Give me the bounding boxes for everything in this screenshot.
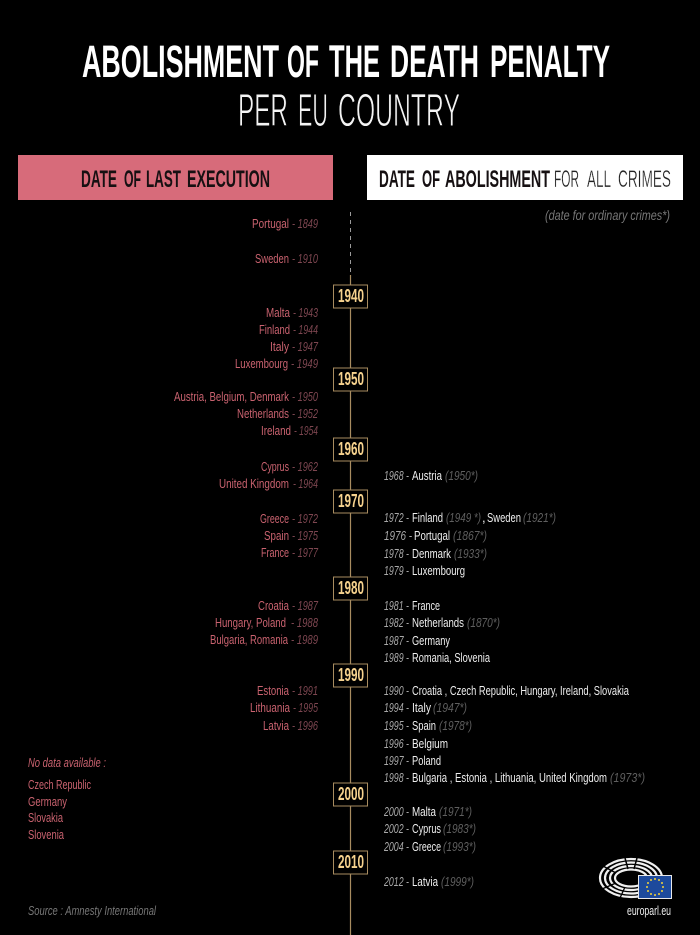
row: 2004 Greece: Greece <box>412 839 441 854</box>
row: 1997 Poland: Poland <box>412 753 441 768</box>
decade marker: 2000 <box>334 783 368 806</box>
row: 1989 Romania, Slovenia: 1989 - <box>384 650 409 665</box>
row: Greece 1972: - 1972 <box>292 511 319 526</box>
row: 1968 Austria: 1968 - <box>384 468 409 483</box>
row: 1996 Belgium: 1996 - <box>384 736 409 751</box>
row: Finland 1944: Finland <box>259 322 290 337</box>
row: 1972 Finland, Sweden: (1949 *) <box>446 510 481 525</box>
row: Ireland 1954: - 1954 <box>294 423 318 438</box>
row: United Kingdom 1964: United Kingdom <box>219 476 289 491</box>
row: 1972 Finland, Sweden <box>384 510 556 525</box>
panel: last execution list <box>174 216 319 733</box>
row: Luxembourg 1949: Luxembourg <box>235 356 288 371</box>
decade marker: 2010: 2010 <box>338 852 364 872</box>
row: 2002 Cyprus: (1983*) <box>443 821 476 836</box>
row: 2000 Malta: 2000 - <box>383 804 409 819</box>
panel: date of abolishment header: FOR <box>554 166 579 193</box>
panel: date of abolishment header: DATE <box>379 166 415 193</box>
row: 2002 Cyprus <box>383 821 476 836</box>
row: Ireland 1954: Ireland <box>261 423 291 438</box>
row: Sweden 1910: - 1910 <box>292 251 319 266</box>
title <box>82 36 610 136</box>
row: Lithuania 1995: Lithuania <box>250 700 291 715</box>
row: 1976 Portugal: Portugal <box>414 528 450 543</box>
row: 1968 Austria: Austria <box>412 468 443 483</box>
row: 1987 Germany: 1987 - <box>384 633 409 648</box>
row: Italy 1947 <box>270 339 319 354</box>
row: Hungary, Poland 1988: Hungary, Poland <box>215 615 286 630</box>
row: 1979 Luxembourg: Luxembourg <box>412 563 465 578</box>
row: 1979 Luxembourg: 1979 - <box>384 563 409 578</box>
decade marker: 1950: 1950 <box>338 369 364 389</box>
row: 1981 France: France <box>412 598 440 613</box>
row: Malta 1943: Malta <box>266 305 291 320</box>
row: France 1977: France <box>261 545 289 560</box>
row: Cyprus 1962: Cyprus <box>261 459 289 474</box>
row: 1978 Denmark: (1933*) <box>454 546 487 561</box>
row: 2000 Malta: Malta <box>412 804 437 819</box>
row: Latvia 1996 <box>263 718 319 733</box>
row: 1979 Luxembourg <box>384 563 465 578</box>
row: Hungary, Poland 1988: - 1988 <box>291 615 319 630</box>
panel: no data available <box>28 755 106 842</box>
title: PENALTY <box>490 36 610 87</box>
row: 1978 Denmark: 1978 - <box>384 546 409 561</box>
row: Estonia 1991: Estonia <box>257 683 290 698</box>
row: 1994 Italy <box>384 700 467 715</box>
row: Lithuania 1995: - 1995 <box>293 700 319 715</box>
row: 1994 Italy: 1994 - <box>384 700 409 715</box>
row: 2000 Malta <box>383 804 472 819</box>
row: Croatia 1987 <box>258 598 319 613</box>
row: 1998 group: Bulgaria , Estonia , Lithuania, United Kingdom <box>412 770 607 785</box>
row: 1995 Spain: Spain <box>412 718 436 733</box>
row: 1994 Italy: Italy <box>412 700 431 715</box>
row: France 1977: - 1977 <box>292 545 319 560</box>
panel: no data available: Czech Republic <box>28 777 91 792</box>
decade marker: 1940: 1940 <box>338 286 364 306</box>
row: 1994 Italy: (1947*) <box>433 700 467 715</box>
row: 1982 Netherlands: 1982 - <box>384 615 409 630</box>
panel: date of last execution header: OF <box>124 166 141 193</box>
row: Bulgaria, Romania 1989: - 1989 <box>291 632 318 647</box>
row: 2004 Greece: 2004 - <box>383 839 409 854</box>
row: 1972 Finland, Sweden: (1921*) <box>523 510 556 525</box>
row: Cyprus 1962: - 1962 <box>292 459 319 474</box>
title: PER <box>238 84 288 136</box>
panel: no data available: Slovenia <box>28 827 65 842</box>
row: 2002 Cyprus: 2002 - <box>383 821 409 836</box>
row: Finland 1944: - 1944 <box>293 322 318 337</box>
row: Croatia 1987: Croatia <box>258 598 290 613</box>
row: Netherlands 1952: - 1952 <box>292 406 319 421</box>
decade marker: 1980 <box>334 577 368 600</box>
row: Austria, Belgium, Denmark 1950: Austria, Belgium, Denmark <box>174 389 289 404</box>
panel: date of last execution header: DATE <box>81 166 117 193</box>
row: Italy 1947: Italy <box>270 339 289 354</box>
row: Austria, Belgium, Denmark 1950: - 1950 <box>292 389 319 404</box>
panel: no data available: Germany <box>28 794 67 809</box>
panel: no data available: Slovakia <box>28 810 64 825</box>
row: 2000 Malta: (1971*) <box>439 804 472 819</box>
row: 1987 Germany: Germany <box>412 633 450 648</box>
row: 1982 Netherlands: Netherlands <box>412 615 464 630</box>
logo: European Parliament <box>600 858 672 918</box>
decade marker: 1970: 1970 <box>338 491 364 511</box>
row: 1997 Poland: 1997 - <box>384 753 409 768</box>
icon: hemicycle <box>600 858 662 898</box>
decade marker: 2000: 2000 <box>338 784 364 804</box>
row: 2012 Latvia <box>383 874 474 889</box>
decade marker: 2010 <box>334 851 368 874</box>
row: 1997 Poland <box>384 753 441 768</box>
row: 2004 Greece: (1993*) <box>443 839 476 854</box>
row: 1987 Germany <box>384 633 450 648</box>
logo text: europarl.eu <box>627 903 671 918</box>
title: DEATH <box>390 36 479 87</box>
row: Malta 1943 <box>266 305 319 320</box>
row: 1976 Portugal: (1867*) <box>453 528 487 543</box>
row: 1995 Spain <box>384 718 472 733</box>
icon: EU flag <box>638 876 672 898</box>
panel: date of abolishment header: ALL <box>587 166 611 193</box>
title: ABOLISHMENT <box>82 36 279 87</box>
row: United Kingdom 1964: - 1964 <box>293 476 318 491</box>
row: Croatia 1987: - 1987 <box>292 598 319 613</box>
decade marker: 1940 <box>334 285 368 308</box>
row: 1995 Spain: (1978*) <box>439 718 472 733</box>
title: COUNTRY <box>338 84 460 136</box>
row: Ireland 1954 <box>261 423 318 438</box>
row: 1981 France <box>384 598 440 613</box>
row: 1972 Finland, Sweden: Sweden <box>487 510 521 525</box>
row: Spain 1975: Spain <box>264 528 289 543</box>
row: 1996 Belgium: Belgium <box>412 736 448 751</box>
source: Source : Amnesty International <box>28 903 157 918</box>
row: Spain 1975: - 1975 <box>292 528 319 543</box>
title: THE <box>329 36 380 87</box>
row: 1978 Denmark: Denmark <box>412 546 451 561</box>
row: 2012 Latvia: 2012 - <box>383 874 409 889</box>
row: Malta 1943: - 1943 <box>293 305 319 320</box>
row: 1989 Romania, Slovenia <box>384 650 491 665</box>
decade marker: 1990 <box>334 664 368 687</box>
row: Latvia 1996: Latvia <box>263 718 290 733</box>
row: 2012 Latvia: (1999*) <box>441 874 474 889</box>
decade marker: 1960 <box>334 438 368 461</box>
row: Portugal 1849: Portugal <box>252 216 289 231</box>
row: 2004 Greece <box>383 839 476 854</box>
row: Spain 1975 <box>264 528 319 543</box>
row: 1978 Denmark <box>384 546 487 561</box>
row: 1995 Spain: 1995 - <box>384 718 409 733</box>
row: 1990 group <box>384 683 630 698</box>
row: Sweden 1910: Sweden <box>255 251 289 266</box>
row: Latvia 1996: - 1996 <box>292 718 319 733</box>
panel: date of abolishment header: ABOLISHMENT <box>445 166 550 193</box>
row: Bulgaria, Romania 1989: Bulgaria, Romania <box>210 632 289 647</box>
row: 1968 Austria: (1950*) <box>445 468 478 483</box>
decade marker: 1950 <box>334 368 368 391</box>
title: EU <box>298 84 328 136</box>
row: Portugal 1849: - 1849 <box>292 216 318 231</box>
row: 1976 Portugal <box>384 528 487 543</box>
decade marker: 1970 <box>334 490 368 513</box>
row: 1968 Austria <box>384 468 478 483</box>
panel: date of abolishment header: OF <box>422 166 440 193</box>
panel: date of abolishment header <box>367 155 683 200</box>
panel: abolishment list <box>383 468 645 889</box>
row: 1982 Netherlands: (1870*) <box>467 615 500 630</box>
panel: date of last execution header <box>18 155 333 200</box>
row: 1982 Netherlands <box>384 615 500 630</box>
row: Luxembourg 1949: - 1949 <box>291 356 318 371</box>
row: 2002 Cyprus: Cyprus <box>412 821 441 836</box>
timeline axis <box>350 212 352 935</box>
row: 1990 group: 1990 - <box>384 683 409 698</box>
panel: date of last execution header: EXECUTION <box>187 166 270 193</box>
row: Greece 1972: Greece <box>260 511 289 526</box>
decade marker: 1980: 1980 <box>338 578 364 598</box>
decade marker: 1990: 1990 <box>338 665 364 685</box>
decade marker: 1960: 1960 <box>338 439 364 459</box>
row: 1972 Finland, Sweden: , <box>482 510 486 525</box>
row: Italy 1947: - 1947 <box>292 339 319 354</box>
row: 1996 Belgium <box>384 736 448 751</box>
row: 1998 group: (1973*) <box>610 770 645 785</box>
panel: date of last execution header: LAST <box>146 166 181 193</box>
row: Netherlands 1952: Netherlands <box>237 406 289 421</box>
panel: no data available: No data available : <box>28 755 106 770</box>
row: Estonia 1991: - 1991 <box>292 683 318 698</box>
title: OF <box>287 36 319 87</box>
row: 1981 France: 1981 - <box>384 598 409 613</box>
row: 1972 Finland, Sweden: Finland <box>412 510 443 525</box>
row: 1989 Romania, Slovenia: Romania, Slovenia <box>412 650 491 665</box>
row: 1976 Portugal: 1976 - <box>384 528 412 543</box>
row: 1998 group: 1998 - <box>384 770 409 785</box>
row: 2012 Latvia: Latvia <box>412 874 439 889</box>
row: 1972 Finland, Sweden: 1972 - <box>384 510 409 525</box>
